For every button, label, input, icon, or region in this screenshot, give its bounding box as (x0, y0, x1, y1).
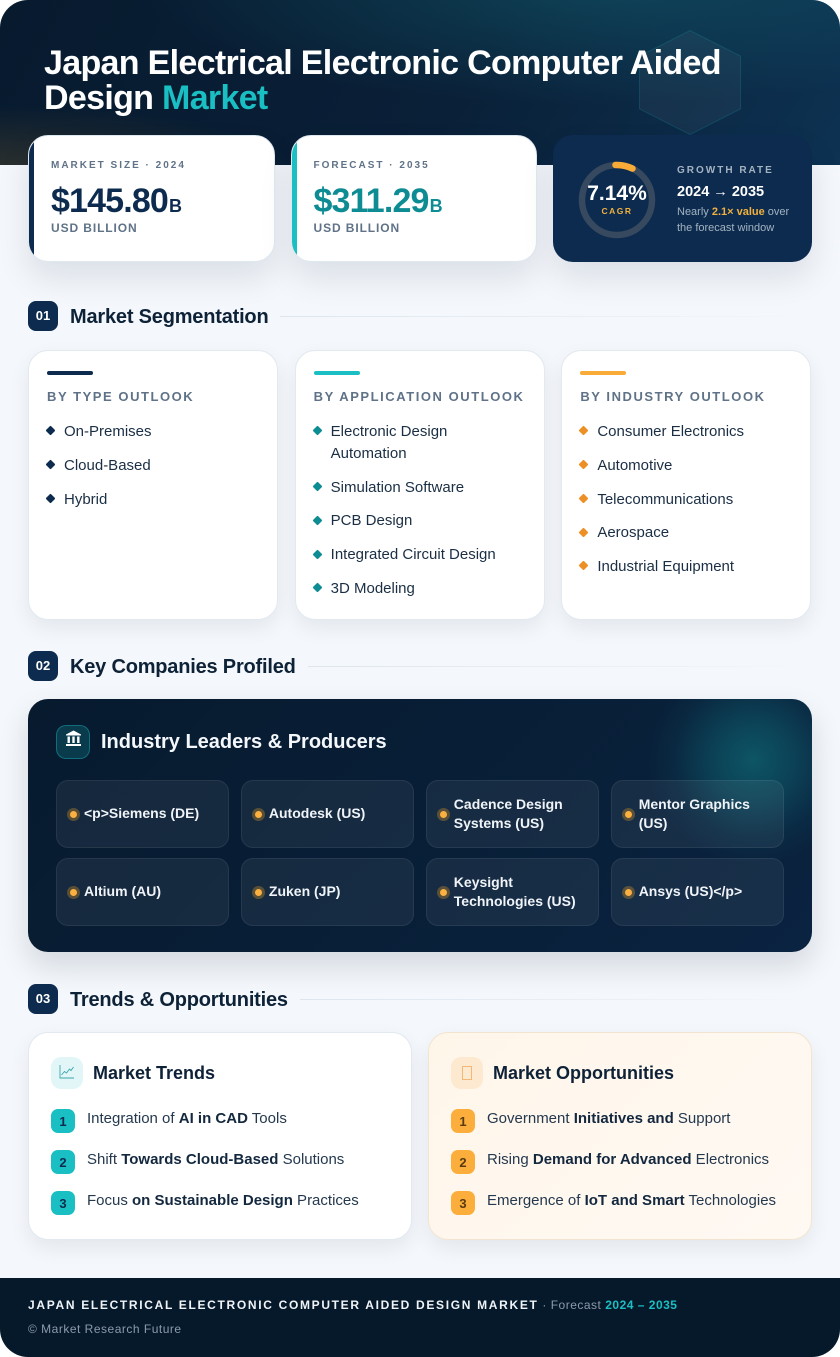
section heading: key companies: Key Companies Profiled (70, 656, 296, 678)
stat card: market size: MARKET SIZE · 2024 (51, 160, 186, 171)
panel: market trends: Focus on Sustainable Design Practices (87, 1192, 359, 1209)
stat card: forecast: $311.29B (314, 182, 443, 220)
panel: by type: BY TYPE OUTLOOK (47, 389, 194, 404)
footer title: JAPAN ELECTRICAL ELECTRONIC COMPUTER AIDED DESIGN MARKET · Forecast 2024 – 2035 (28, 1298, 677, 1312)
panel: by application: 3D Modeling (331, 580, 415, 597)
company: Cadence (426, 780, 599, 848)
footer copyright: © Market Research Future (28, 1322, 182, 1336)
panel: industry leaders (28, 699, 812, 952)
panel: by application: Integrated Circuit Design (331, 546, 496, 563)
company: Keysight: Keysight Technologies (US) (454, 874, 576, 908)
section heading: trends and opportunities: Trends & Opportunities (70, 989, 288, 1011)
panel: by industry: Aerospace (597, 524, 669, 541)
growth rate note: Nearly 2.1× value over (677, 206, 789, 218)
header band (0, 0, 840, 165)
section heading: market segmentation: Market Segmentation (70, 306, 268, 328)
panel: by industry: Telecommunications (597, 491, 733, 508)
company: Ansys: Ansys (US)</p> (639, 883, 742, 899)
panel: market opportunities: Emergence of IoT and Smart Technologies (487, 1192, 776, 1209)
panel: market opportunities: 3 (459, 1196, 467, 1211)
icon: institution (56, 725, 90, 759)
panel: by industry: Consumer Electronics (597, 423, 744, 440)
panel: by application: PCB Design (331, 512, 412, 529)
panel: by application (295, 350, 545, 620)
section heading: key companies (28, 651, 634, 681)
panel: market trends: 1 (59, 1114, 67, 1129)
decorative hexagon (639, 30, 741, 135)
heading: Market Opportunities (493, 1063, 674, 1083)
panel: by industry: Industrial Equipment (597, 558, 734, 575)
panel: by industry: BY INDUSTRY OUTLOOK (580, 389, 766, 404)
title: Design Market (44, 79, 268, 117)
growth rate years: 2024 → 2035 (677, 184, 764, 200)
panel: by application: Automation (331, 445, 407, 462)
company: Keysight (426, 858, 599, 926)
company: Zuken (241, 858, 414, 926)
section heading: trends and opportunities (28, 984, 632, 1014)
title: Japan Electrical Electronic Computer Aided (44, 44, 721, 82)
panel: market opportunities: 1 (459, 1114, 467, 1129)
company: Autodesk (241, 780, 414, 848)
company: Altium (56, 858, 229, 926)
growth rate note (677, 206, 789, 234)
CAGR label: CAGR (601, 206, 633, 216)
CAGR ring (578, 162, 656, 238)
panel: by type (28, 350, 278, 620)
footer (0, 1278, 840, 1357)
growth rate label: GROWTH RATE (677, 165, 774, 176)
panel: by application: Electronic Design (331, 423, 447, 440)
company: Cadence: Cadence Design Systems (US) (454, 796, 563, 830)
company: Mentor Graphics: Mentor Graphics (US) (639, 796, 750, 830)
icon: missing glyph box (451, 1057, 483, 1089)
panel: by type: Hybrid (64, 491, 107, 508)
company: Altium: Altium (AU) (84, 883, 161, 899)
section heading: key companies: 02 (36, 658, 50, 673)
company: Siemens (56, 780, 229, 848)
panel: market opportunities (428, 1032, 812, 1240)
stat card: CAGR (553, 135, 812, 262)
panel: market opportunities: 2 (459, 1155, 467, 1170)
growth rate note: the forecast window (677, 222, 774, 234)
icon: chart (51, 1057, 83, 1089)
panel: market trends: 2 (59, 1155, 67, 1170)
company: Autodesk: Autodesk (US) (269, 805, 365, 821)
company: Zuken: Zuken (JP) (269, 883, 340, 899)
panel heading: Industry Leaders & Producers (101, 731, 387, 753)
panel: by industry: Automotive (597, 457, 672, 474)
stat card: forecast: USD BILLION (314, 221, 400, 235)
stat card: forecast (290, 135, 537, 262)
panel: market trends: Shift Towards Cloud-Based Solutions (87, 1151, 344, 1168)
panel: by application: Simulation Software (331, 479, 464, 496)
panel: by industry (561, 350, 811, 620)
panel: market trends (28, 1032, 412, 1240)
stat card: market size: $145.80B (51, 182, 182, 220)
section heading: trends and opportunities: 03 (36, 991, 50, 1006)
company: Ansys (611, 858, 784, 926)
panel: by type: On-Premises (64, 423, 152, 440)
company: Mentor Graphics (611, 780, 784, 848)
panel: market opportunities: Government Initiatives and Support (487, 1110, 730, 1127)
panel: market trends: 3 (59, 1196, 67, 1211)
panel: by type: Cloud-Based (64, 457, 151, 474)
panel: market trends: Integration of AI in CAD Tools (87, 1110, 287, 1127)
CAGR value: 7.14% (587, 182, 647, 205)
title (44, 44, 721, 117)
section heading: market segmentation (28, 301, 626, 331)
stat card: forecast: FORECAST · 2035 (314, 160, 430, 171)
heading: Market Trends (93, 1063, 215, 1083)
stat card: market size (28, 135, 274, 262)
stat card: market size: USD BILLION (51, 221, 138, 235)
panel: by application: BY APPLICATION OUTLOOK (314, 389, 524, 404)
section heading: market segmentation: 01 (36, 308, 50, 323)
company: Siemens: <p>Siemens (DE) (84, 805, 199, 821)
panel: market opportunities: Rising Demand for Advanced Electronics (487, 1151, 769, 1168)
